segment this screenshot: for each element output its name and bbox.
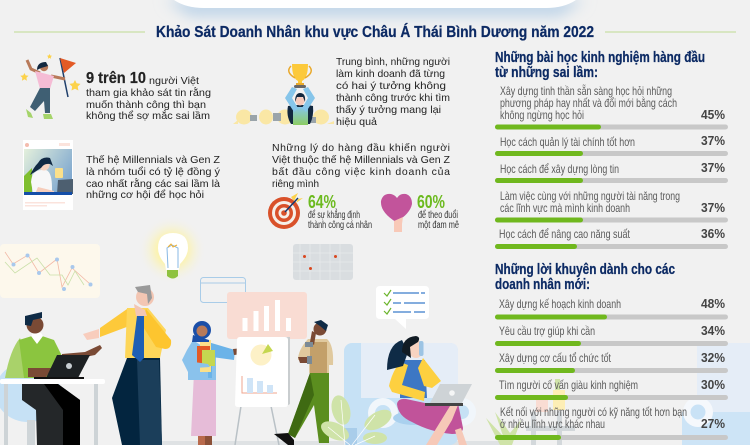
row: 32%: 32%: [701, 350, 725, 365]
top banner edge: [165, 0, 585, 16]
row: 48%: Xây dựng kế hoạch kinh doanh: [499, 297, 621, 311]
row: 36%: [495, 226, 728, 249]
row: 37% trust: 37%: [701, 160, 725, 175]
icon: woman with flag: [20, 54, 80, 119]
stat: 60%: 60%: [417, 192, 445, 212]
row: 32%: Xây dựng cơ cấu tổ chức tốt: [499, 351, 611, 365]
stat: 60%: để theo đuổi: [418, 209, 458, 221]
text: millennials and gen z: [86, 154, 221, 201]
text: 9 in 10: 9 trên 10: [86, 70, 146, 87]
row: 48%: 48%: [701, 296, 725, 311]
panel: advice for new entrepreneurs: [495, 261, 728, 440]
text: top reasons: Việt thuộc thế hệ Millennials và Gen Z: [272, 154, 451, 166]
icon: heart in hand: [381, 194, 412, 232]
title rule left: [14, 31, 145, 33]
row: 37% finance: 37%: [701, 133, 725, 148]
row: 34%: [495, 323, 728, 346]
row: 27%: [495, 405, 728, 440]
title: Khảo Sát Doanh Nhân khu vực Châu Á Thái Bình Dương năm 2022: [156, 22, 594, 41]
illustration: standing man in green trousers: [274, 320, 333, 445]
background: pink bar panel: [227, 292, 307, 339]
row: 34%: 34%: [701, 323, 725, 338]
text: millennials and gen z: Thế hệ Millennials và Gen Z: [86, 154, 221, 166]
floor: [130, 441, 510, 445]
row: 32%: [495, 350, 728, 373]
illustration: potted plant: [318, 393, 395, 445]
stat: 64%: 64%: [308, 192, 336, 212]
stat: 60%: một đam mê: [418, 220, 459, 231]
illustration: presenter woman: [182, 321, 256, 445]
text: millennials and gen z: cao nhất rằng các sai lầm là: [86, 177, 220, 190]
row: 27%: Kết nối với những người có kỹ năng tốt hơn bạn: [500, 405, 687, 419]
illustration: sofa: [344, 343, 476, 445]
text: millennials and gen z: là nhóm tuổi có tỷ lệ đồng ý: [86, 166, 221, 178]
row: 30%: [495, 377, 728, 400]
illustration: seated man at table: [0, 312, 105, 445]
icon: target with dart: [268, 193, 303, 229]
illustration: woman on phone with laptop: [387, 336, 472, 445]
text: top reasons: riêng mình: [272, 178, 319, 190]
heading: advice: doanh nhân mới:: [495, 276, 590, 293]
row: 37% finance: [495, 133, 728, 156]
stat: 64%: để sự khẳng định: [308, 208, 360, 221]
text: two business ideas: [336, 56, 450, 128]
title rule right: [605, 31, 736, 33]
text: two business ideas: thành công trước khi tìm: [336, 92, 450, 104]
stat: 60%: [417, 192, 459, 231]
stat: 64%: [308, 192, 372, 231]
heading: lessons: [495, 49, 705, 81]
row: 36%: Học cách để nâng cao năng suất: [499, 227, 630, 241]
row: 45%: không ngừng học hỏi: [500, 108, 584, 122]
row: 34%: Yêu cầu trợ giúp khi cần: [499, 324, 595, 338]
row: 45%: 45%: [701, 107, 725, 122]
text: two business ideas: Trung bình, những người: [336, 56, 450, 68]
row: 37% talent: Làm việc cùng với những người tài năng trong: [500, 189, 680, 203]
stat: 64%: thành công cá nhân: [308, 220, 372, 231]
text: two business ideas: làm kinh doanh đã từng: [336, 68, 445, 80]
row: 37% trust: [495, 160, 728, 183]
text: millennials and gen z: những cơ hội để học hỏi: [86, 189, 204, 201]
illustration: standing man with tie: [83, 285, 171, 445]
text: 9 in 10: muốn thành công thì bạn: [86, 99, 206, 111]
background: grid map panel: [293, 244, 353, 280]
text: 9 in 10: không thể sợ mắc sai lầm: [86, 109, 210, 122]
illustration: whiteboard: [235, 337, 290, 445]
background: lower right room: [486, 343, 750, 445]
text: top reasons: bất đầu công việc kinh doanh của: [272, 166, 450, 178]
panel: lessons from mistakes: [495, 49, 728, 249]
row: 37% talent: 37%: [701, 200, 725, 215]
text: 9 in 10: người Việt: [149, 75, 199, 87]
row: 45%: phương pháp hay nhất và đổi mới bằng cách: [500, 95, 677, 110]
row: 45%: [495, 83, 728, 130]
icon: social media card: [23, 140, 73, 210]
heading: advice: Những lời khuyên dành cho các: [495, 261, 675, 278]
row: 37% talent: các lĩnh vực mà mình kinh doanh: [500, 201, 630, 215]
text: top reasons: Những lý do hàng đầu khiến người: [272, 142, 450, 154]
background: light bulb: [138, 216, 206, 284]
text: two business ideas: hiệu quả: [336, 116, 377, 128]
text: two business ideas: có hai ý tưởng không: [336, 80, 446, 92]
heading: advice: [495, 261, 675, 293]
text: top reasons: [272, 142, 451, 190]
heading: lessons: từ những sai lầm:: [495, 64, 598, 81]
row: 30%: Tìm người cố vấn giàu kinh nghiệm: [499, 378, 638, 392]
row: 37% trust: Học cách để xây dựng lòng tin: [500, 162, 619, 176]
text: two business ideas: thấy ý tưởng mang lại: [336, 104, 441, 116]
row: 36%: 36%: [701, 226, 725, 241]
row: 48%: [495, 296, 728, 320]
row: 37% talent: [495, 189, 728, 222]
row: 27%: ở nhiều lĩnh vực khác nhau: [500, 417, 605, 431]
text: 9 in 10: [86, 70, 211, 122]
row: 27%: 27%: [701, 416, 725, 431]
text: 9 in 10: tham gia khảo sát tin rằng: [86, 86, 211, 99]
background: chart panel: [0, 244, 100, 298]
row: 45%: Xây dựng tinh thần sẵn sàng học hỏi những: [500, 83, 672, 98]
background: browser window outline: [200, 278, 246, 302]
row: 37% finance: Học cách quản lý tài chính tốt hơn: [500, 135, 635, 149]
icon: woman lifting trophy among bulbs: [233, 64, 334, 125]
speech bubble checklist: [376, 286, 429, 329]
row: 30%: 30%: [701, 377, 725, 392]
